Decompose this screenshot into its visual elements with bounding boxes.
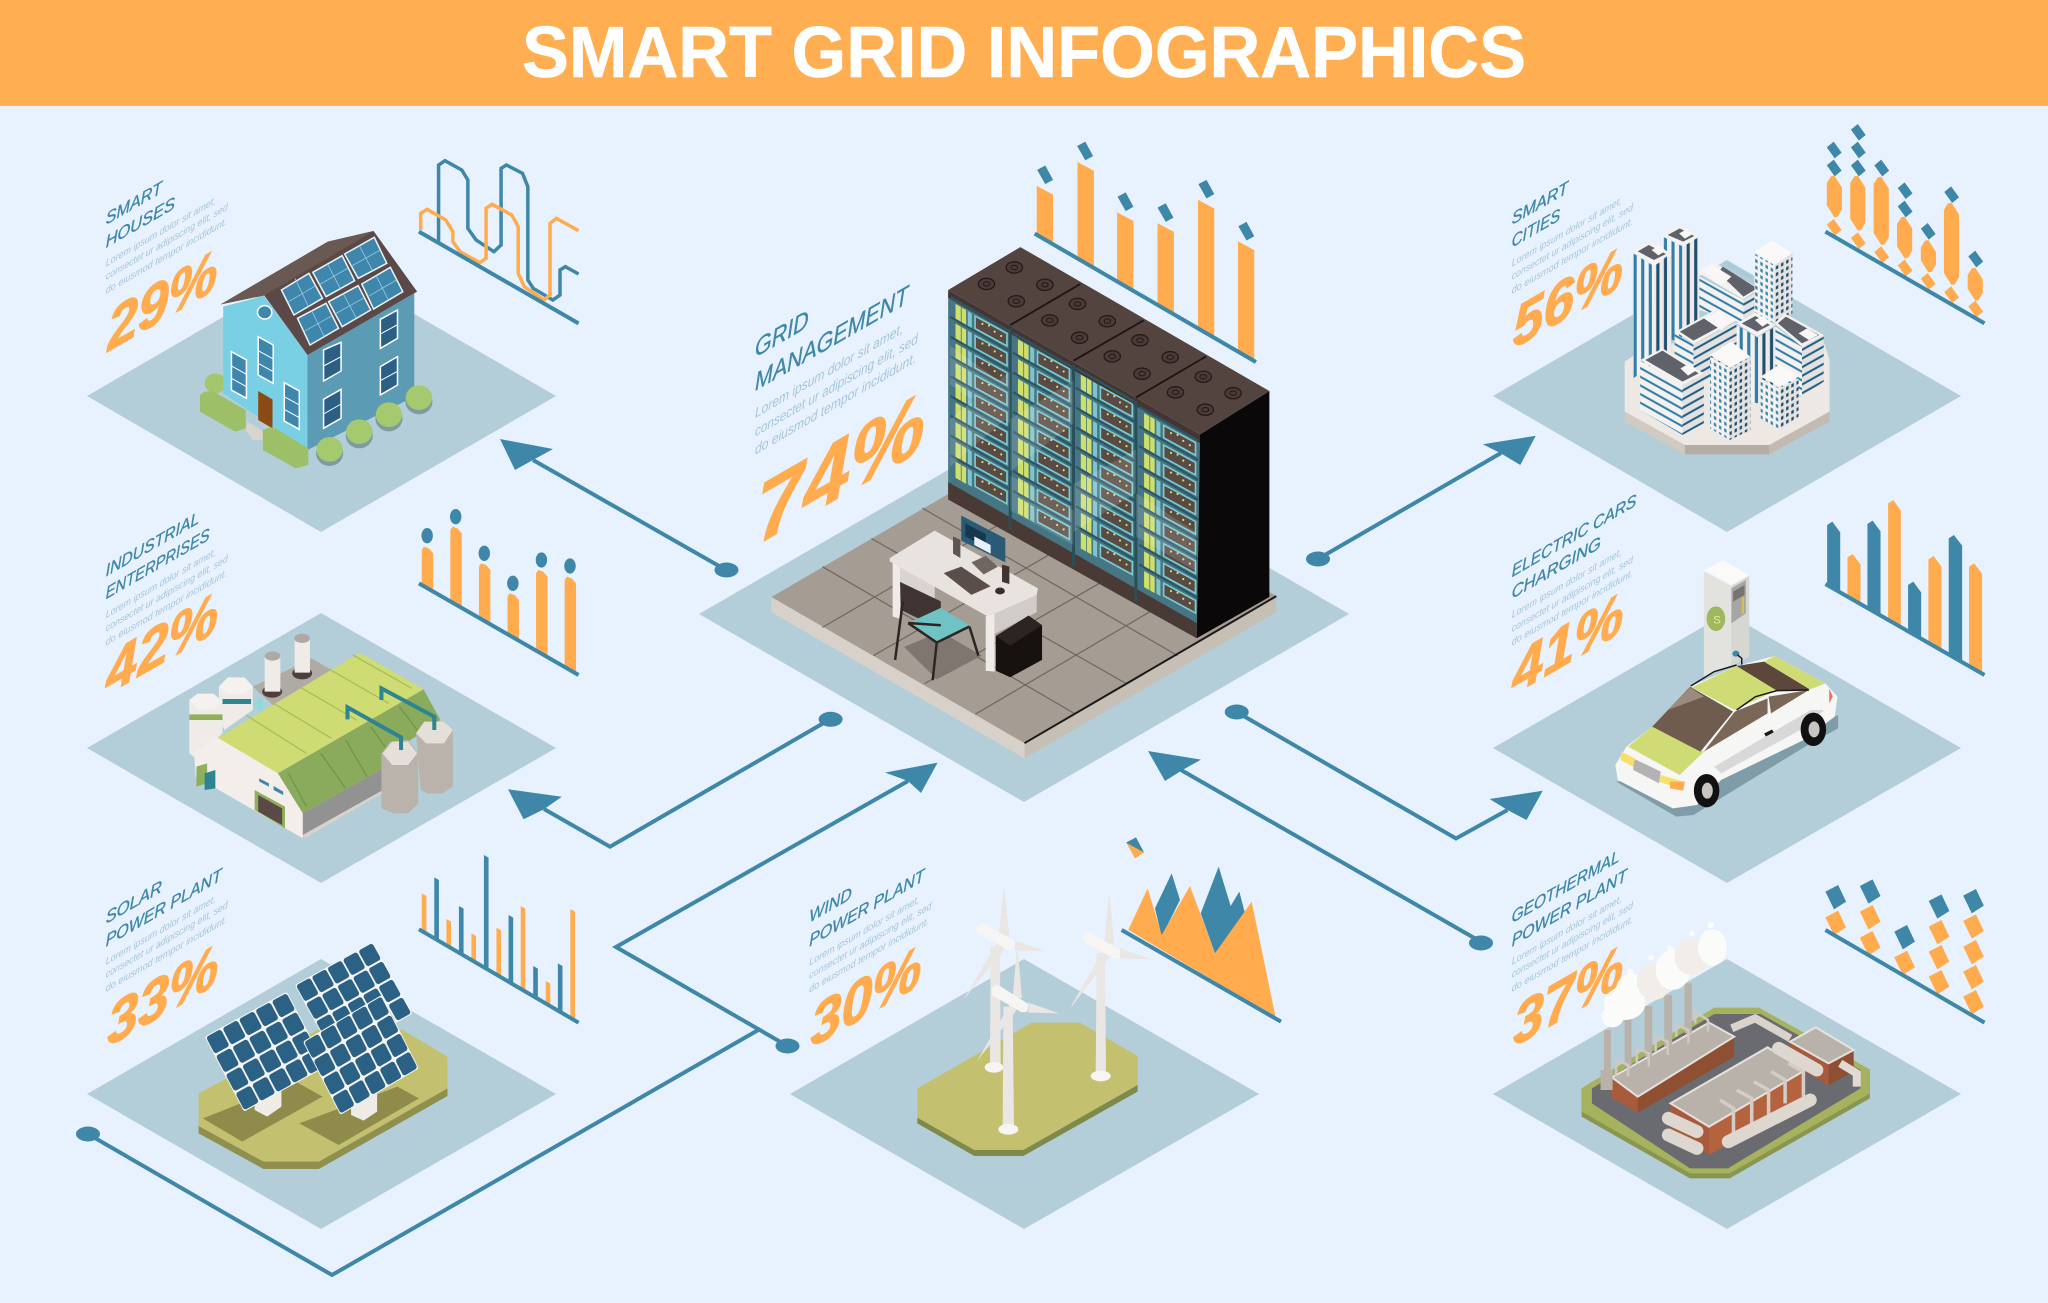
illustration: solar panels [199, 942, 447, 1169]
turbine back [963, 885, 1045, 1073]
long brick block [1611, 1023, 1734, 1113]
platform diamond [1493, 613, 1961, 883]
connectors [76, 436, 1543, 1275]
front right tower [1761, 364, 1799, 430]
heading: wind power plant: POWER PLANT [809, 864, 926, 951]
line: solar power plant to grid [76, 1029, 760, 1275]
heading: grid management: MANAGEMENT [755, 280, 910, 397]
percentage 41%: 41% [1512, 580, 1624, 709]
area chart [1122, 837, 1281, 1022]
illustration: house [200, 231, 432, 468]
body text: do eiusmod tempor incididunt. [809, 916, 929, 996]
panel: grid management [699, 142, 1349, 802]
right building [1774, 313, 1824, 397]
body text: Lorem ipsum dolor sit amet, [106, 195, 216, 270]
panel: electric cars charging [1493, 490, 1985, 883]
heading: industrial enterprises: INDUSTRIAL [106, 508, 199, 581]
bar chart [1825, 500, 1985, 675]
body text: Lorem ipsum dolor sit amet, [755, 319, 903, 421]
panel: smart cities [1493, 124, 1985, 532]
percentage 29%: 29% [107, 237, 217, 365]
body text: do eiusmod tempor incididunt. [1512, 216, 1633, 297]
desk and chair [890, 516, 1042, 680]
percentage 74%: 74% [757, 372, 925, 563]
illustration: geothermal plant [1582, 922, 1870, 1178]
percentage 33%: 33% [108, 932, 218, 1060]
platform diamond [87, 260, 556, 532]
heading: smart cities: SMART [1512, 177, 1570, 229]
platform diamond [790, 959, 1259, 1229]
body text: do eiusmod tempor incididunt. [1512, 914, 1633, 995]
illustration: wind turbines [917, 885, 1152, 1156]
heading: smart houses: HOUSES [106, 193, 176, 252]
body text: do eiusmod tempor incididunt. [106, 568, 227, 649]
platform diamond [699, 426, 1349, 802]
heading: wind power plant: WIND [809, 883, 852, 927]
body text: Lorem ipsum dolor sit amet, [106, 893, 216, 968]
panel: geothermal power plant [1493, 846, 1985, 1229]
percentage 37%: 37% [1513, 933, 1623, 1060]
small blue tower [1737, 313, 1775, 403]
heading: smart cities [1512, 177, 1570, 252]
illustration: factory [189, 634, 453, 838]
body text: Lorem ipsum dolor sit amet, [1512, 547, 1622, 621]
platform diamond [87, 613, 556, 883]
panel: solar power plant [87, 855, 579, 1229]
heading: geothermal power plant: POWER PLANT [1512, 864, 1628, 951]
percentage 30%: 30% [811, 933, 922, 1061]
platform diamond [87, 959, 556, 1229]
illustration: server room [771, 247, 1276, 758]
body text: consectet ur adipiscing elit, sed [1512, 900, 1633, 981]
heading: smart cities: CITIES [1512, 204, 1561, 252]
body text: consectet ur adipiscing elit, sed [1512, 554, 1633, 635]
charging station: S [1713, 614, 1721, 626]
body text: consectet ur adipiscing elit, sed [809, 900, 932, 982]
percentage 56%: 56% [1513, 234, 1623, 362]
panel: smart houses [87, 161, 579, 532]
body text: Lorem ipsum dolor sit amet, [809, 894, 919, 969]
line chart [419, 161, 579, 323]
wide building [1699, 263, 1760, 323]
heading: solar power plant: POWER PLANT [106, 864, 223, 951]
body text: consectet ur adipiscing elit, sed [106, 201, 228, 283]
arrow: grid to electric cars [1225, 704, 1543, 838]
arrow: grid to smart cities [1306, 436, 1536, 566]
thin bar chart [419, 855, 579, 1023]
body text: consectet ur adipiscing elit, sed [1512, 202, 1633, 283]
turbine front [977, 943, 1059, 1135]
candle chart [1825, 124, 1985, 323]
heading: grid management: GRID [755, 305, 809, 364]
panel: industrial enterprises [87, 508, 579, 883]
illustration: charging station and car [1615, 560, 1838, 817]
heading: industrial enterprises: ENTERPRISES [106, 524, 210, 603]
percentage 42%: 42% [105, 579, 218, 709]
platform diamond [1493, 260, 1961, 532]
body text: do eiusmod tempor incididunt. [1512, 568, 1633, 649]
arrow: grid to smart houses [500, 439, 738, 578]
illustration: city buildings [1625, 225, 1830, 454]
tall tower [1633, 242, 1671, 378]
body text: Lorem ipsum dolor sit amet, [106, 547, 216, 621]
body text: do eiusmod tempor incididunt. [755, 349, 916, 458]
windows tower [1754, 241, 1792, 323]
heading: electric cars charging: CHARGING [1512, 532, 1601, 603]
car [1615, 656, 1837, 808]
body text: do eiusmod tempor incididunt. [106, 216, 227, 297]
heading: smart houses [106, 177, 176, 252]
header band [0, 0, 2048, 106]
bar chart with tags [1035, 142, 1256, 362]
server racks [948, 247, 1269, 638]
bar chart with dots [419, 509, 579, 675]
brick block with pipes [1668, 1047, 1817, 1155]
chimneys [1601, 983, 1692, 1090]
body text: Lorem ipsum dolor sit amet, [1512, 893, 1622, 968]
smoke [1602, 922, 1727, 1027]
body text: consectet ur adipiscing elit, sed [755, 329, 919, 440]
turbine right [1069, 892, 1152, 1081]
body text: consectet ur adipiscing elit, sed [106, 553, 228, 635]
title: SMART GRID INFOGRAPHICS [522, 13, 1526, 93]
heading: solar power plant: SOLAR [106, 876, 162, 928]
platform diamond [1493, 959, 1961, 1229]
tower behind [1663, 225, 1700, 343]
arrow: wind power plant to grid [616, 763, 938, 1054]
small brick block [1790, 1027, 1854, 1085]
body text: consectet ur adipiscing elit, sed [106, 899, 228, 981]
body text: Lorem ipsum dolor sit amet, [1512, 195, 1622, 270]
arrow: grid to industrial enterprises [508, 712, 843, 847]
heading: geothermal power plant: GEOTHERMAL [1512, 846, 1620, 927]
tile chart [1825, 879, 1985, 1023]
front center tower [1710, 342, 1750, 440]
heading: smart houses: SMART [106, 177, 164, 229]
center building [1675, 308, 1737, 387]
heading: electric cars charging: ELECTRIC CARS [1512, 490, 1637, 581]
arrow: geothermal plant to grid [1148, 751, 1493, 950]
panel: wind power plant [790, 837, 1281, 1229]
front left building [1640, 348, 1704, 435]
charging station [1704, 560, 1749, 677]
body text: do eiusmod tempor incididunt. [106, 914, 227, 995]
